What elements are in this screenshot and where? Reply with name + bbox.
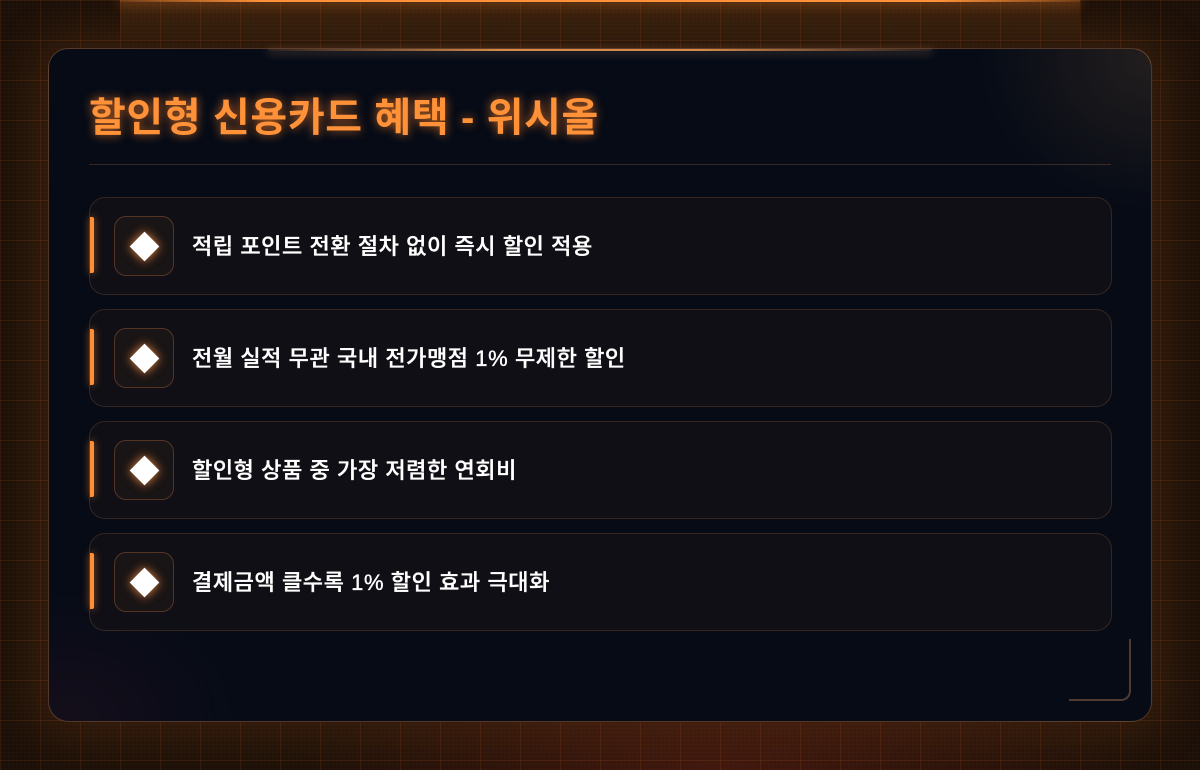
- benefit text 2: 전월 실적 무관 국내 전가맹점 1% 무제한 할인: [192, 346, 626, 371]
- icon: diamond 2: [114, 328, 174, 388]
- top glow bar: [120, 0, 1080, 2]
- benefit text 4: 결제금액 클수록 1% 할인 효과 극대화: [192, 570, 550, 595]
- benefit item 1: [89, 197, 1112, 295]
- icon: diamond 4: [114, 552, 174, 612]
- title: 할인형 신용카드 혜택 - 위시올: [89, 96, 599, 140]
- accent bar 1: [90, 217, 94, 273]
- accent bar 3: [90, 441, 94, 497]
- icon: diamond 3: [114, 440, 174, 500]
- benefit text 3: 할인형 상품 중 가장 저렴한 연회비: [192, 458, 517, 483]
- benefit text 1: 적립 포인트 전환 절차 없이 즉시 할인 적용: [192, 234, 593, 259]
- benefit item 3: [89, 421, 1112, 519]
- accent bar 2: [90, 329, 94, 385]
- accent bar 4: [90, 553, 94, 609]
- card top accent line: [268, 49, 932, 51]
- benefit item 2: [89, 309, 1112, 407]
- benefit item 4: [89, 533, 1112, 631]
- icon: diamond 1: [114, 216, 174, 276]
- corner bracket: [1069, 639, 1131, 701]
